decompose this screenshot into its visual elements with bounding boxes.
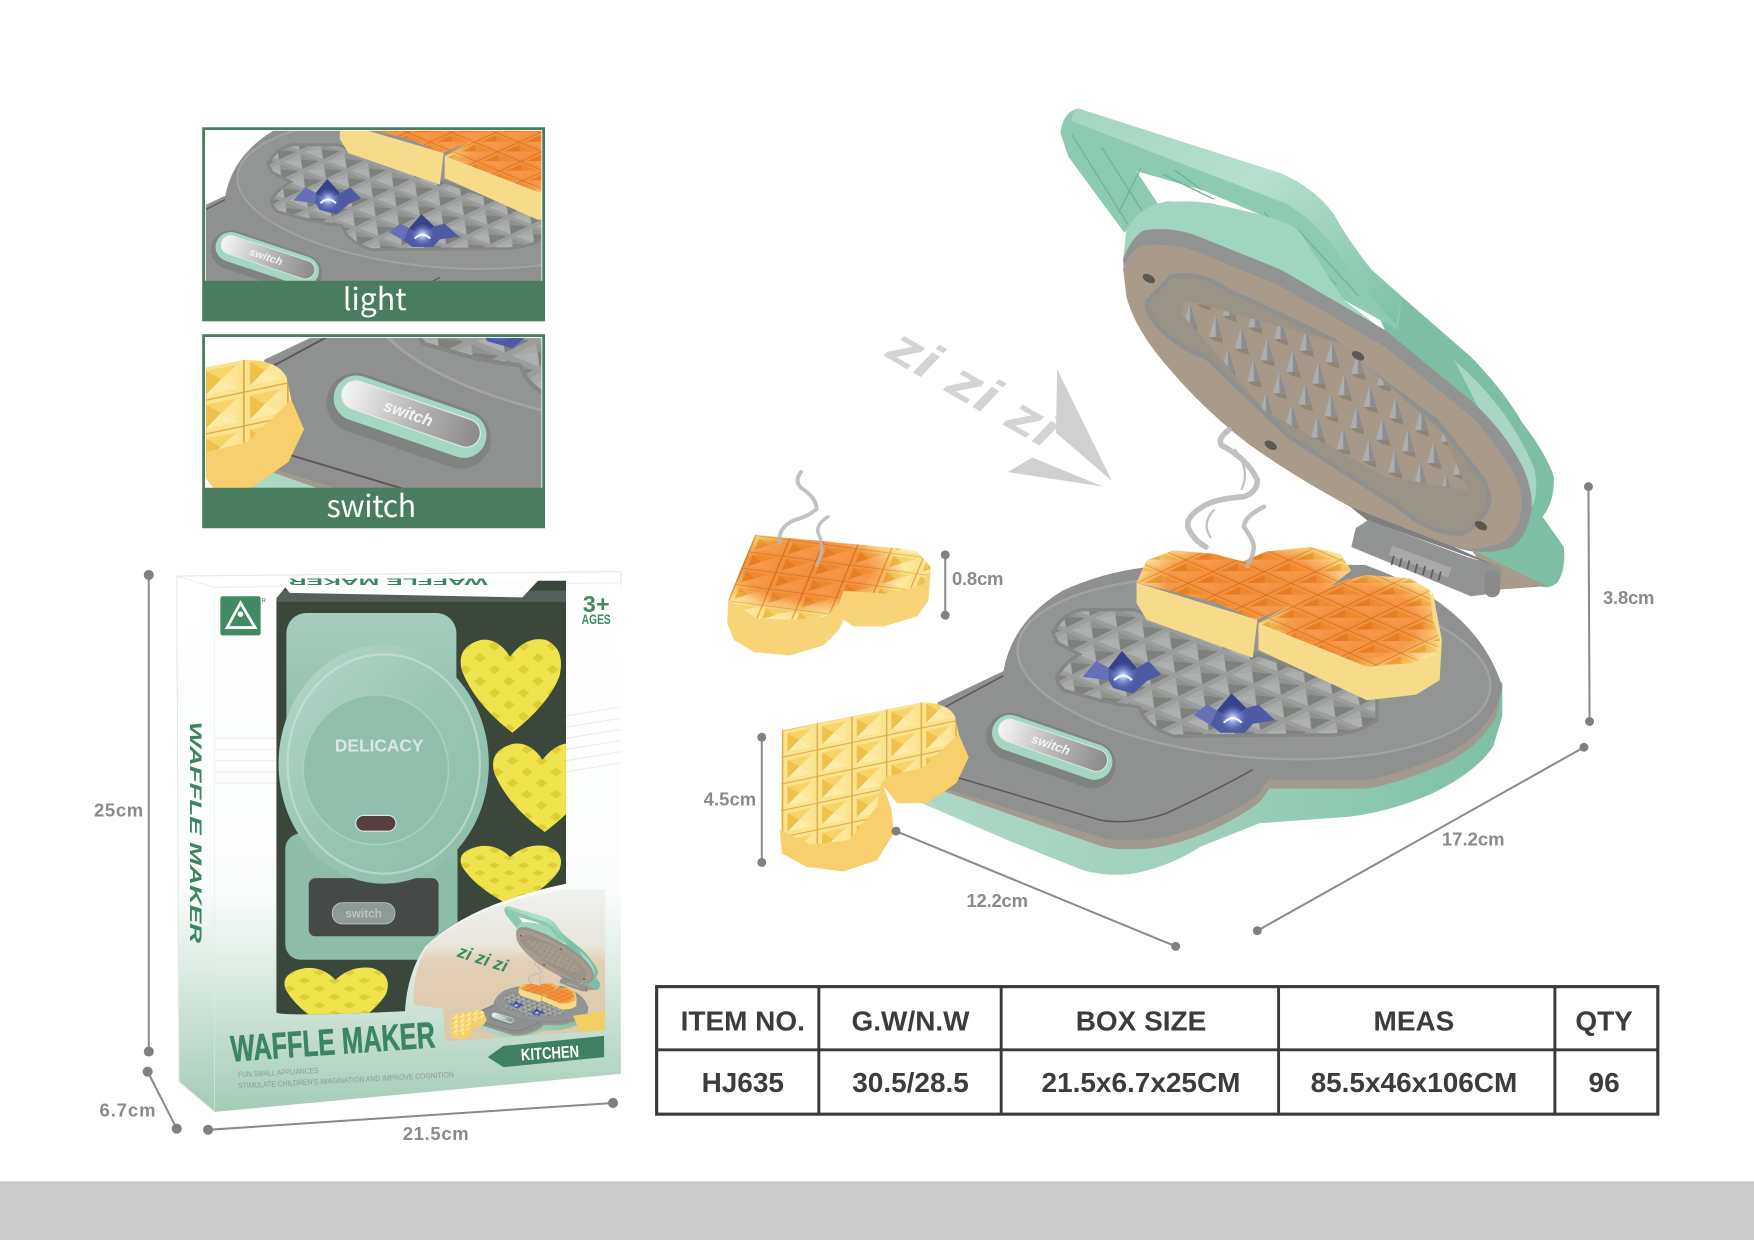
box side and top (177, 572, 621, 1112)
dimension: box depth 6.7cm: 6.7cm (100, 1099, 155, 1120)
dimension: maker height 3.8cm: 3.8cm (1603, 587, 1654, 608)
specification table (657, 987, 1658, 1114)
specification table: 96 (1589, 1067, 1620, 1098)
logo: R (262, 598, 266, 604)
dimension: maker width 12.2cm: 12.2cm (966, 890, 1028, 911)
spine text: WAFFLE MAKER (186, 722, 205, 943)
flap text: WAFFLE MAKER (287, 576, 488, 586)
top flap (280, 579, 539, 597)
specification table: MEAS (1374, 1005, 1454, 1036)
orange waffle B (1255, 566, 1452, 700)
dimension: box width 21.5cm (203, 1098, 618, 1144)
specification table: BOX SIZE (1076, 1005, 1206, 1036)
floating waffle with steam (711, 472, 931, 656)
inset: light: light (343, 275, 407, 319)
dimension: box width 21.5cm: 21.5cm (403, 1123, 469, 1144)
switch button: switch (1029, 731, 1072, 758)
box edges (177, 576, 621, 587)
dimension: waffle thickness 0.8cm: 0.8cm (952, 568, 1003, 589)
box title: WAFFLE MAKER (229, 1014, 436, 1070)
switch button (980, 706, 1122, 795)
tan strip (937, 687, 1502, 849)
dimension: box depth 6.7cm (100, 1067, 182, 1134)
specification table: 21.5x6.7x25CM (1042, 1067, 1240, 1098)
lower body (780, 535, 1502, 875)
lifestyle photo: zi zi zi (454, 941, 511, 977)
box front (215, 583, 621, 1112)
dimension: waffle thickness 0.8cm (941, 550, 1003, 620)
hinge (1350, 507, 1502, 597)
logo (220, 596, 266, 635)
lid plate (1123, 229, 1532, 552)
fine print: STIMULATE CHILDREN'S IMAGINATION AND IMPROVE COGNITION (238, 1070, 454, 1090)
specification table: 30.5/28.5 (852, 1067, 969, 1098)
dimension: maker length 17.2cm: 17.2cm (1442, 829, 1505, 850)
age mark: AGES (582, 611, 611, 627)
lid with handle (1060, 109, 1564, 590)
inset: switch (202, 334, 546, 528)
box window with toy: DELICACY (335, 736, 424, 756)
gray plate (937, 565, 1502, 840)
lid recess (1147, 275, 1489, 534)
lifestyle photo (414, 890, 606, 1042)
box window with toy: switch (345, 907, 382, 920)
age mark: 3+ (583, 591, 610, 617)
dimension: box height 25cm (94, 570, 154, 1057)
footer band (0, 1181, 1754, 1240)
specification table: QTY (1575, 1005, 1633, 1036)
specification table: ITEM NO. (681, 1005, 805, 1036)
age mark (582, 591, 611, 627)
packaging wave lines (215, 707, 621, 783)
steam over waffles (1188, 430, 1264, 566)
product box (177, 572, 621, 1112)
specification table: 85.5x46x106CM (1311, 1067, 1517, 1098)
blue light A (1083, 651, 1161, 694)
orange waffle A (1128, 535, 1360, 658)
inset: light (202, 127, 546, 322)
dimension: maker width 12.2cm (892, 827, 1180, 951)
main product: waffle maker (780, 109, 1564, 875)
dimension: maker height 3.8cm (1584, 482, 1654, 726)
specification table: G.W/N.W (852, 1005, 970, 1036)
dimension: box height 25cm: 25cm (94, 800, 143, 821)
dimension: waffle height 4.5cm: 4.5cm (704, 788, 756, 809)
box window with toy (276, 580, 566, 1014)
kitchen tag (488, 1036, 604, 1067)
fine print: FUN SMALL APPLIANCES (238, 1066, 319, 1079)
yellow waffle on handle (780, 702, 969, 871)
sound effect text: zi zi zi: zi zi zi (877, 314, 1072, 460)
blue light B (1194, 694, 1275, 733)
dimension: waffle height 4.5cm (704, 733, 766, 867)
kitchen tag: KITCHEN (520, 1042, 580, 1064)
lid spikes (1181, 300, 1468, 490)
dimension: maker length 17.2cm (1253, 743, 1588, 935)
specification table: HJ635 (702, 1067, 784, 1098)
sound effect text: zi zi zi (877, 314, 1112, 487)
inset: switch: switch (327, 482, 416, 526)
base teal shell (922, 682, 1502, 875)
waffle recess with pyramids (1053, 610, 1377, 736)
